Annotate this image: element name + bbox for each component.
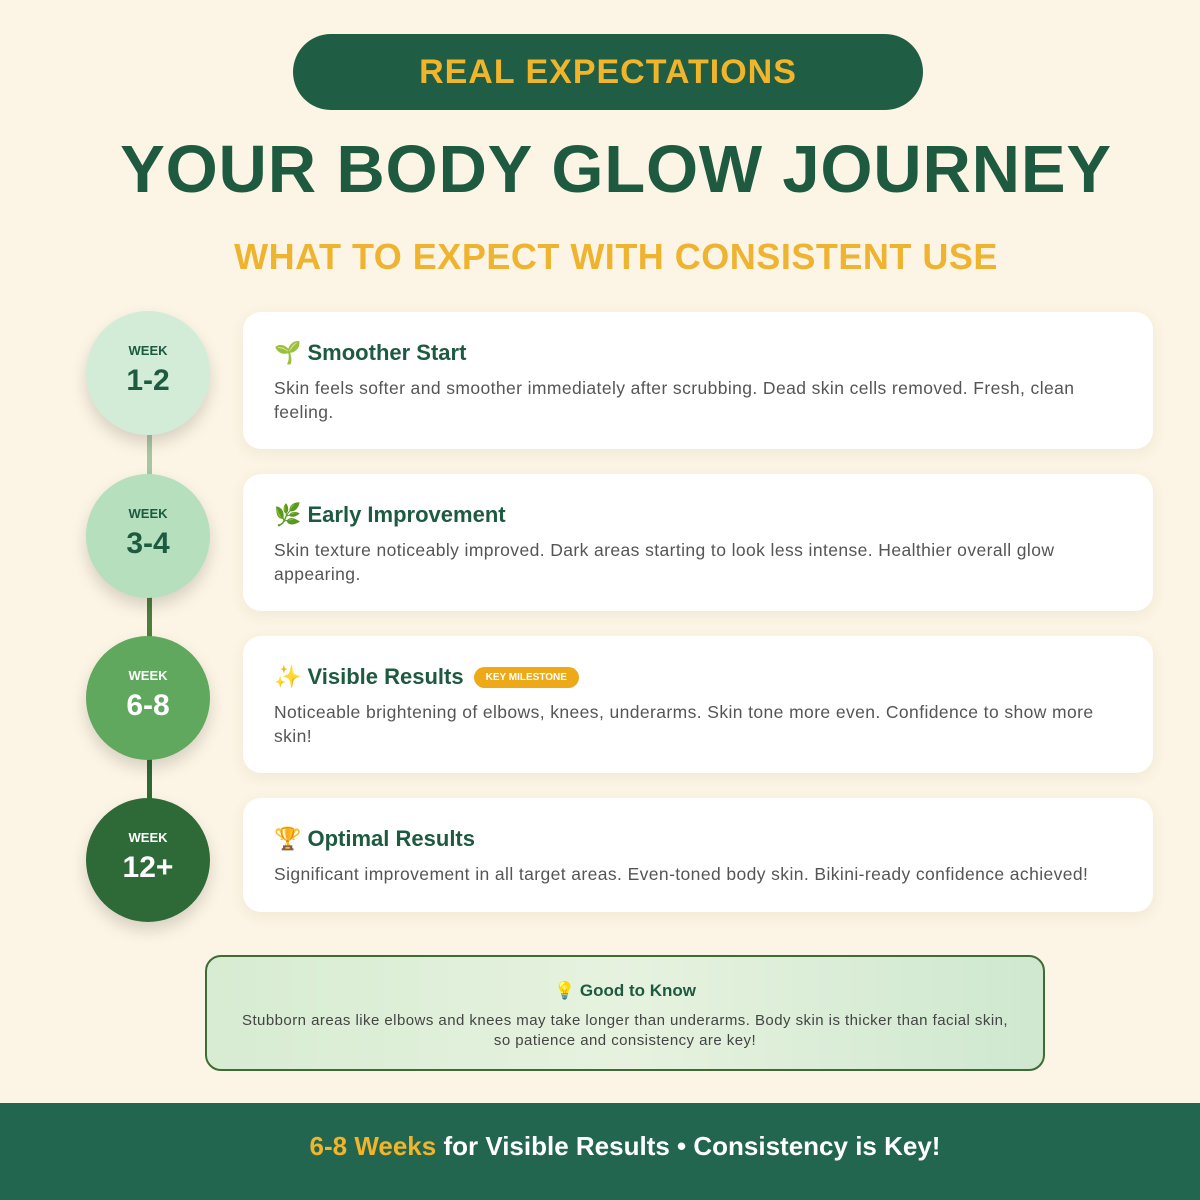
circle week 12+: WEEK	[128, 830, 168, 845]
callout: good to know: Stubborn areas like elbows and knees may take longer than underarms. Body skin is thicker than facial skin,	[242, 1012, 1008, 1029]
circle week 6-8: 6-8	[126, 689, 170, 722]
title: YOUR BODY GLOW JOURNEY	[120, 132, 1112, 207]
circle week 3-4: 3-4	[126, 527, 170, 560]
circle week 1-2	[86, 311, 210, 435]
card: smoother start	[243, 312, 1153, 449]
circle week 3-4	[86, 474, 210, 598]
circle week 12+	[86, 798, 210, 922]
timeline connector 3	[147, 759, 152, 799]
subtitle: WHAT TO EXPECT WITH CONSISTENT USE	[234, 236, 998, 277]
circle week 6-8	[86, 636, 210, 760]
card: visible results: ✨ Visible Results	[274, 664, 464, 689]
card: smoother start: Skin feels softer and smoother immediately after scrubbing. Dead skin cells removed. Fresh, clean feeling.	[274, 378, 1074, 422]
card: early improvement: 🌿 Early Improvement	[274, 502, 506, 527]
footer banner	[0, 1103, 1200, 1200]
card: early improvement	[243, 474, 1153, 611]
card: smoother start: 🌱 Smoother Start	[274, 340, 466, 365]
timeline connector 1	[147, 435, 152, 475]
circle week 1-2: WEEK	[128, 343, 168, 358]
card: visible results: KEY MILESTONE	[486, 672, 567, 682]
circle week 1-2: 1-2	[126, 364, 170, 397]
callout: good to know: 💡 Good to Know	[554, 981, 696, 1000]
header pill	[293, 34, 923, 110]
card: optimal results: Significant improvement in all target areas. Even-toned body skin. Bikini-ready confidence achieved!	[274, 864, 1088, 884]
card: optimal results: 🏆 Optimal Results	[274, 826, 475, 851]
circle week 3-4: WEEK	[128, 506, 168, 521]
timeline connector 2	[147, 597, 152, 637]
card: early improvement: Skin texture noticeably improved. Dark areas starting to look less intense. Healthier overall glow appearing.	[274, 540, 1054, 584]
card: optimal results	[243, 798, 1153, 912]
callout: good to know: so patience and consistency are key!	[494, 1032, 756, 1049]
circle week 6-8: WEEK	[128, 668, 168, 683]
header pill: REAL EXPECTATIONS	[419, 53, 797, 91]
callout: good to know	[205, 955, 1045, 1071]
circle week 12+: 12+	[123, 851, 173, 884]
card: visible results	[243, 636, 1153, 773]
footer banner: 6-8 Weeks for Visible Results • Consistency is Key!	[310, 1131, 940, 1161]
card: visible results: Noticeable brightening of elbows, knees, underarms. Skin tone more even. Confidence to show more skin!	[274, 702, 1094, 746]
